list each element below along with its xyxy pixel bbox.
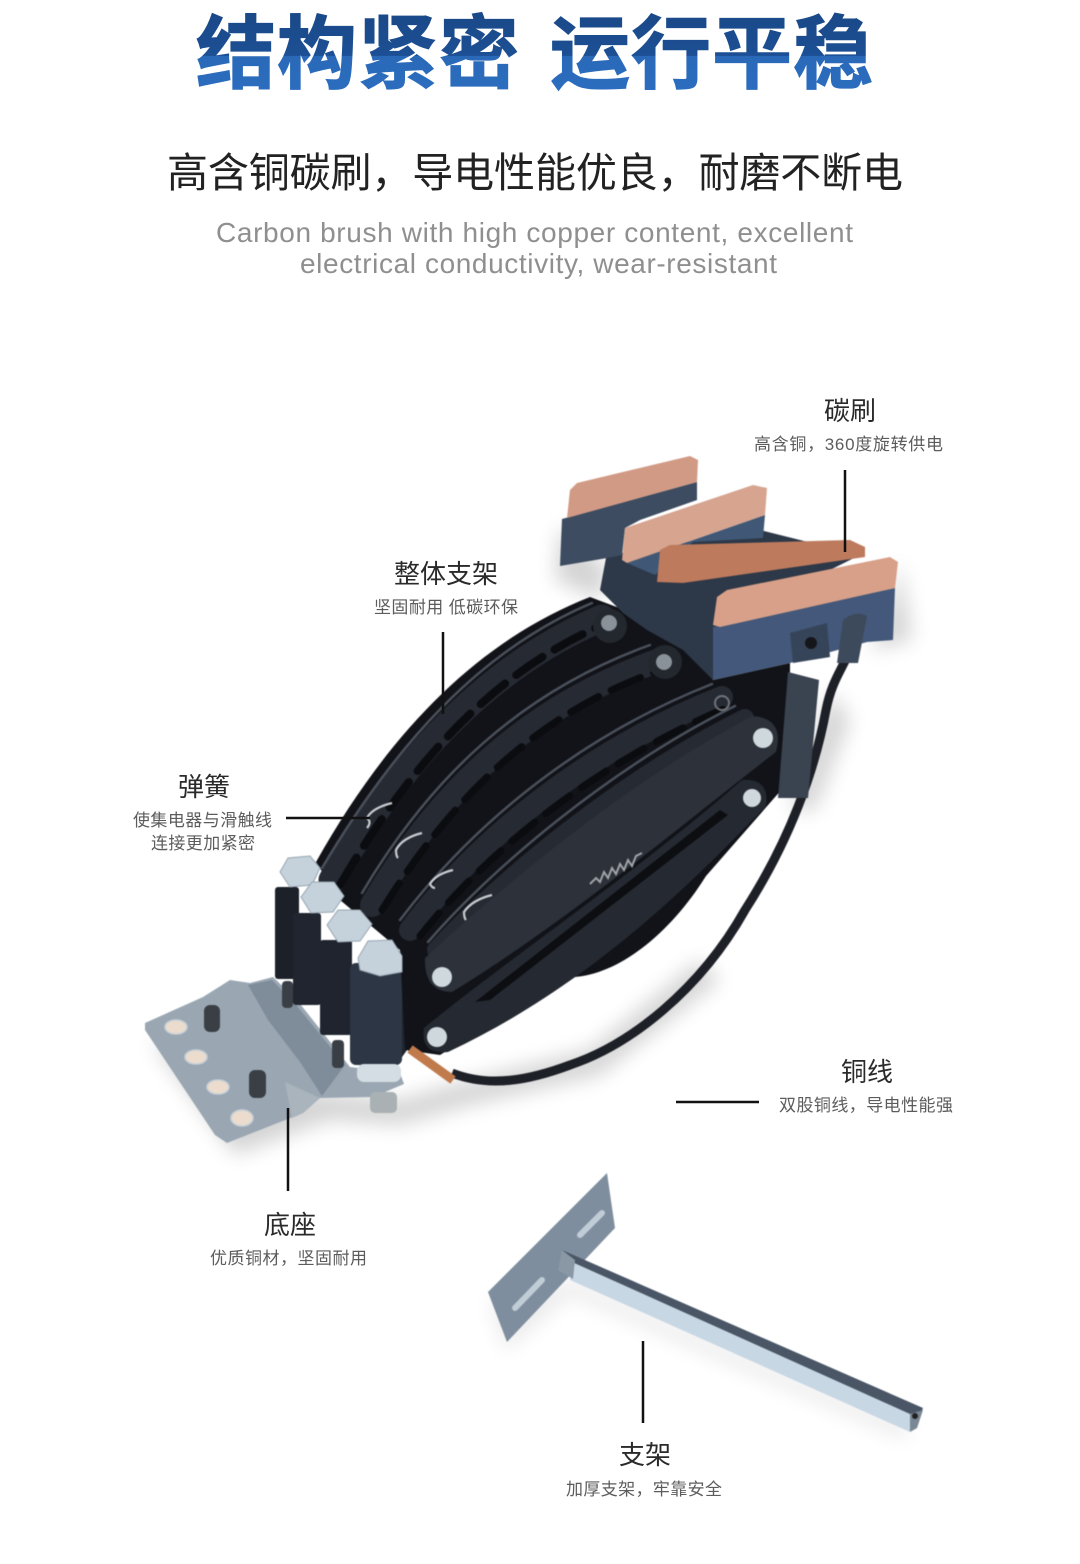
callout: spring: 弹簧 — [178, 772, 230, 802]
callout: bracket: 加厚支架，牢靠安全 — [566, 1480, 722, 1499]
base plate — [145, 977, 404, 1143]
mounting holes — [165, 1020, 253, 1126]
support bracket — [488, 1173, 923, 1440]
washer and nut — [357, 1064, 401, 1113]
callout: carbon brush: 高含铜，360度旋转供电 — [754, 435, 943, 454]
callout: spring — [133, 772, 370, 853]
title: 结构紧密 — [196, 10, 520, 99]
callout: frame: 坚固耐用 低碳环保 — [374, 598, 518, 617]
english description: electrical conductivity, wear-resistant — [300, 248, 777, 279]
upper body — [600, 530, 860, 680]
vertical bar — [778, 672, 819, 798]
english description — [216, 217, 853, 279]
shadow — [490, 1280, 910, 1440]
callout: base: 优质铜材，坚固耐用 — [210, 1249, 367, 1268]
plate — [488, 1173, 615, 1342]
callout: copper wire: 双股铜线，导电性能强 — [779, 1096, 953, 1115]
rod — [562, 1250, 923, 1415]
english description: Carbon brush with high copper content, excellent — [216, 217, 853, 248]
callout: bracket: 支架 — [619, 1440, 671, 1470]
callout: carbon brush — [754, 396, 943, 552]
callout: copper wire: 铜线 — [841, 1057, 893, 1087]
callout: base: 底座 — [264, 1210, 316, 1240]
callout: spring: 连接更加紧密 — [151, 834, 255, 853]
curved arms — [322, 603, 745, 950]
front plates — [424, 716, 778, 1052]
callout: frame — [374, 559, 518, 714]
subtitle: 高含铜碳刷，导电性能优良，耐磨不断电 — [167, 150, 903, 196]
callout: spring: 使集电器与滑触线 — [133, 810, 272, 830]
arm silhouette — [316, 597, 790, 1055]
callout: frame: 整体支架 — [394, 559, 498, 589]
callout: bracket — [566, 1341, 722, 1499]
soft shadow — [150, 525, 912, 1155]
spring clips — [367, 803, 492, 920]
callout: copper wire — [676, 1057, 953, 1115]
product: collector assembly — [145, 456, 912, 1155]
cable — [452, 650, 850, 1081]
hinge and cable connector — [790, 614, 867, 663]
title: 运行平稳 — [550, 10, 874, 99]
callout: carbon brush: 碳刷 — [824, 396, 876, 426]
copper wire end — [410, 1049, 453, 1080]
hex bolts — [280, 856, 402, 976]
joints — [593, 609, 729, 710]
studs — [204, 981, 344, 1098]
callout: base — [210, 1108, 367, 1268]
bolt columns — [275, 887, 433, 1065]
carbon brush shoes — [560, 456, 898, 680]
